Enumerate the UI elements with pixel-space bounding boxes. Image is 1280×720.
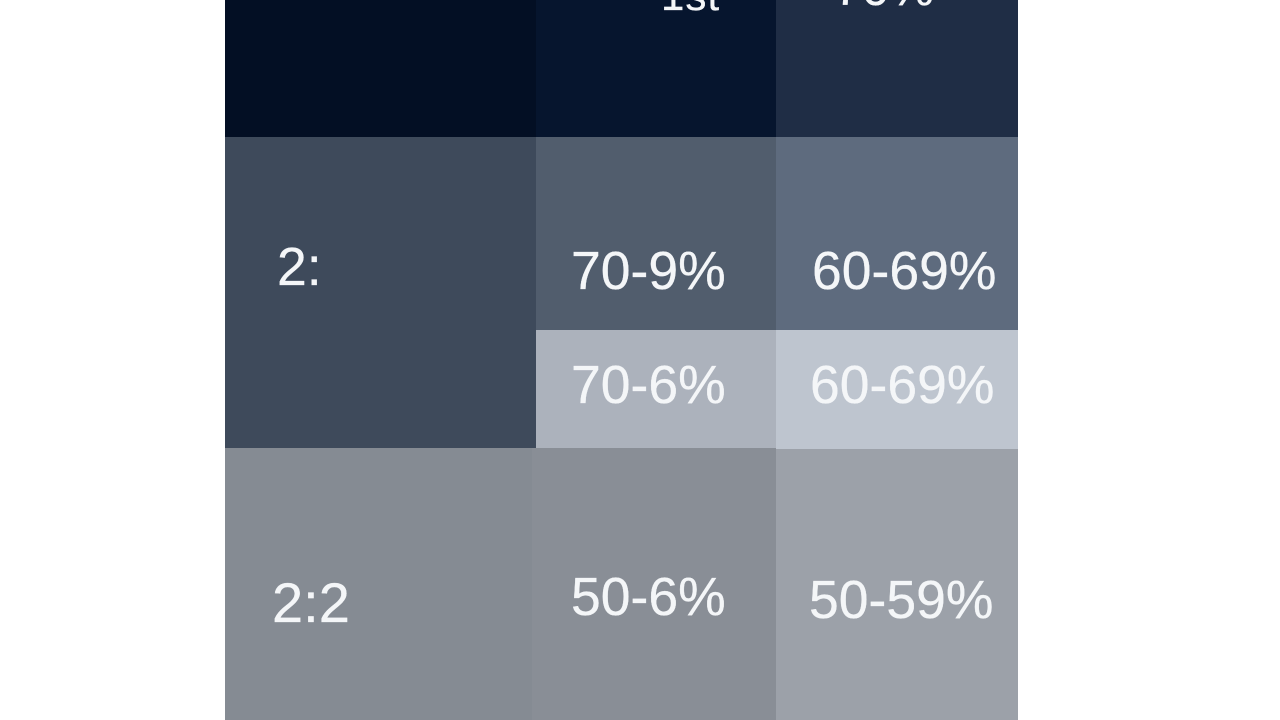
row 2b cell: 70-6%: 70-6%: [571, 356, 726, 415]
row 2 cell: 60-69%: [776, 137, 1018, 330]
row 2 cell: 70-9%: [536, 137, 776, 330]
row 2 cell: 60-69%: 60-69%: [812, 242, 996, 301]
row 1 label cell: [225, 0, 536, 137]
row 1 cell: 70%: [776, 0, 1018, 137]
row 2 label cell: 2:: 2:: [277, 238, 322, 297]
row 2b cell: 60-69%: [776, 330, 1018, 449]
row 2b cell: 60-69%: 60-69%: [810, 356, 994, 415]
row 3 cell: 50-59%: [776, 449, 1018, 720]
row 3 cell: 50-59%: 50-59%: [809, 571, 993, 630]
row 3 cell: 50-6%: [532, 448, 776, 720]
row 3 cell: 50-6%: 50-6%: [571, 568, 726, 627]
row 2 label cell: 2:: [225, 137, 536, 448]
row 1 cell: 1st: [536, 0, 776, 137]
table: [225, 0, 1018, 720]
row 3 label cell: 2:2: [225, 448, 532, 720]
row 3 label cell: 2:2: 2:2: [272, 571, 350, 634]
row 2 cell: 70-9%: 70-9%: [571, 242, 726, 301]
row 2b cell: 70-6%: [536, 330, 776, 449]
